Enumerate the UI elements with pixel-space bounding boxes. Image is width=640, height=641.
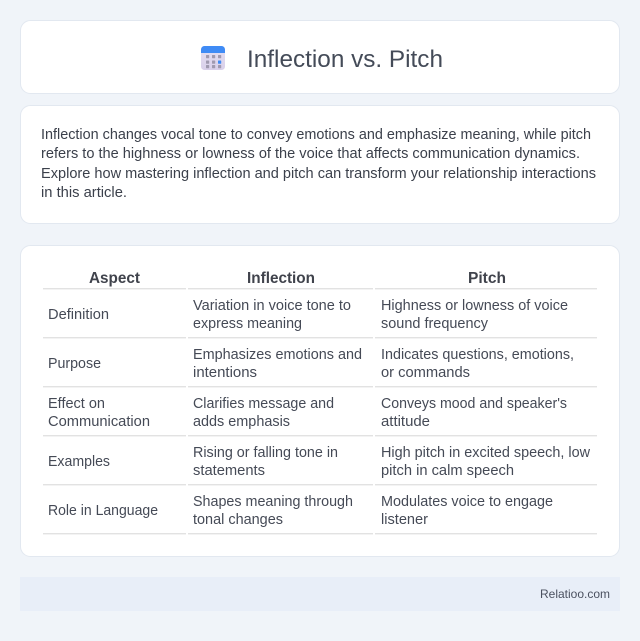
table header: Pitch xyxy=(468,270,506,287)
row: effect on communication: Conveys mood and speaker's xyxy=(381,396,567,412)
panel: footer xyxy=(20,577,620,611)
row: examples: Rising or falling tone in xyxy=(193,445,338,461)
intro paragraph: Explore how mastering inflection and pitch can transform your relationship interactions xyxy=(41,166,596,182)
panel: introduction xyxy=(20,106,620,224)
row: examples: statements xyxy=(193,463,265,479)
icon: calendar xyxy=(201,46,225,70)
intro paragraph: in this article. xyxy=(41,185,127,201)
row: purpose: Emphasizes emotions and xyxy=(193,347,362,363)
footer source text: Relatioo.com xyxy=(540,587,610,601)
panel: comparison table xyxy=(20,246,620,556)
table header xyxy=(89,270,506,287)
row: definition: express meaning xyxy=(193,316,302,332)
row: effect on communication xyxy=(48,396,567,430)
row: role in language: Shapes meaning through xyxy=(193,494,353,510)
row: definition xyxy=(48,298,568,332)
row: definition: Variation in voice tone to xyxy=(193,298,351,314)
intro paragraph: Inflection changes vocal tone to convey emotions and emphasize meaning, while pitch xyxy=(41,127,591,143)
row: purpose: Purpose xyxy=(48,356,101,372)
panel: title header xyxy=(20,20,620,94)
row: examples: pitch in calm speech xyxy=(381,463,514,479)
table header: Aspect xyxy=(89,270,141,287)
row: definition: Highness or lowness of voice xyxy=(381,298,568,314)
row: role in language: Modulates voice to engage xyxy=(381,494,553,510)
table header: Inflection xyxy=(247,270,315,287)
row: purpose: intentions xyxy=(193,365,257,381)
row: purpose xyxy=(48,347,574,381)
row: role in language xyxy=(48,494,553,528)
row: effect on communication: Clarifies message and xyxy=(193,396,334,412)
row: examples xyxy=(48,445,591,479)
row: effect on communication: Effect on xyxy=(48,396,105,412)
row: purpose: Indicates questions, emotions, xyxy=(381,347,574,363)
intro paragraph: refers to the highness or lowness of the voice that affects communication dynamics. xyxy=(41,146,580,162)
row: purpose: or commands xyxy=(381,365,470,381)
row: definition: Definition xyxy=(48,307,109,323)
row: effect on communication: attitude xyxy=(381,414,430,430)
row: role in language: listener xyxy=(381,512,428,528)
row: effect on communication: Communication xyxy=(48,414,150,430)
row: role in language: tonal changes xyxy=(193,512,283,528)
title: Inflection vs. Pitch xyxy=(247,46,443,73)
row: definition: sound frequency xyxy=(381,316,489,332)
row: examples: Examples xyxy=(48,454,110,470)
row: examples: High pitch in excited speech, low xyxy=(381,445,591,461)
intro paragraph xyxy=(41,127,596,201)
row: role in language: Role in Language xyxy=(48,503,158,519)
row: effect on communication: adds emphasis xyxy=(193,414,290,430)
